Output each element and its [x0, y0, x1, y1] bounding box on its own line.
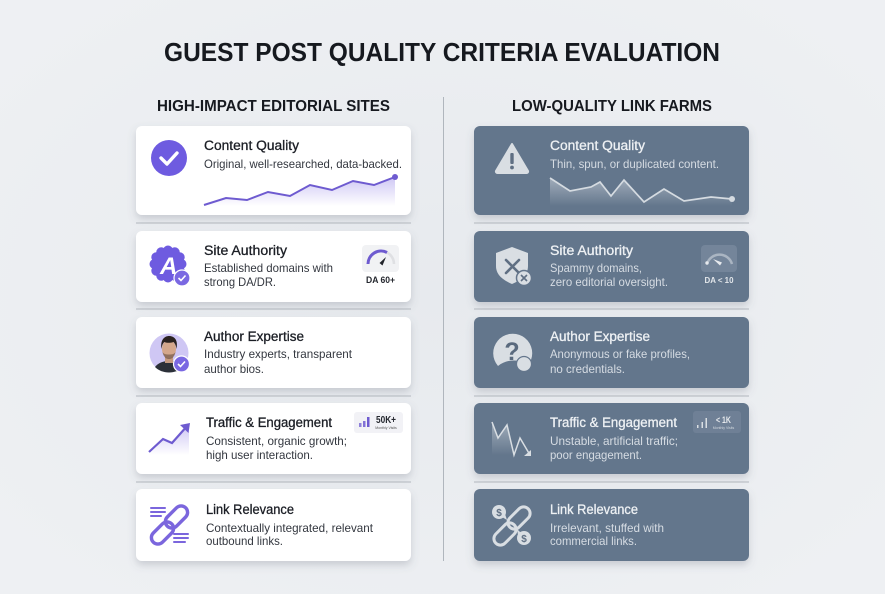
panel: low-quality content quality [474, 126, 749, 215]
card description: Consistent, organic growth; [206, 434, 347, 448]
card description: zero editorial oversight. [550, 275, 668, 289]
card description: strong DA/DR. [204, 275, 276, 289]
card description: Industry experts, transparent [204, 347, 353, 361]
title: GUEST POST QUALITY CRITERIA EVALUATION [164, 37, 720, 67]
icon: chain with dollar coins: $ [496, 508, 502, 519]
line chart: erratic [550, 178, 735, 206]
icon: rising arrow [149, 423, 190, 455]
icon: shield with x [496, 247, 532, 286]
panel: low-quality author expertise [474, 317, 749, 388]
panel: low-quality link relevance [474, 489, 749, 561]
icon: chain with dollar coins [491, 504, 533, 548]
panel: low-quality site authority [474, 231, 749, 302]
card title: Traffic & Engagement [550, 415, 677, 430]
card title: Traffic & Engagement [206, 415, 332, 430]
card title: Author Expertise [550, 329, 650, 344]
card description: no credentials. [550, 362, 625, 376]
stat badge: under 1K monthly visits: Monthly Visits [713, 426, 735, 430]
card description: Established domains with [204, 261, 333, 275]
gauge: DA below 10: DA < 10 [704, 275, 734, 285]
card description [550, 261, 668, 289]
card title: Content Quality [204, 138, 299, 153]
stat badge: under 1K monthly visits: < 1K [716, 415, 731, 426]
icon: authority badge: A [159, 253, 177, 280]
card description: Contextually integrated, relevant [206, 521, 374, 535]
stat badge: under 1K monthly visits [693, 411, 741, 433]
card description [550, 347, 690, 376]
icon: anonymous question profile: ? [504, 338, 520, 366]
icon: author avatar with badge [150, 334, 190, 372]
card description: Irrelevant, stuffed with [550, 521, 664, 535]
gauge: DA 60+: DA 60+ [366, 275, 395, 285]
icon: purple check circle [151, 140, 187, 176]
card description: commercial links. [550, 534, 637, 548]
stat badge: 50K+ monthly visits [354, 412, 403, 433]
icon: anonymous question profile [493, 334, 532, 372]
panel: high-impact author expertise [136, 317, 411, 388]
card description: poor engagement. [550, 448, 642, 462]
card description [550, 521, 664, 548]
card description: high user interaction. [206, 448, 313, 462]
card title: Content Quality [550, 138, 645, 153]
card description: Spammy domains, [550, 261, 642, 275]
card title: Link Relevance [206, 502, 294, 517]
card title: Author Expertise [204, 329, 304, 344]
heading: low-quality column: LOW-QUALITY LINK FARMS [512, 98, 712, 115]
card title: Site Authority [204, 243, 287, 258]
panel: high-impact link relevance [136, 489, 411, 561]
card description [206, 434, 347, 462]
heading: high-impact column: HIGH-IMPACT EDITORIAL SITES [157, 98, 390, 115]
card description: Thin, spun, or duplicated content. [550, 157, 719, 171]
card description: author bios. [204, 362, 264, 376]
card description [550, 434, 678, 462]
card description [206, 521, 374, 548]
panel: high-impact content quality [136, 126, 411, 215]
icon: chain with dollar coins: $ [521, 534, 527, 545]
panel: high-impact traffic and engagement [136, 403, 411, 474]
card description: Anonymous or fake profiles, [550, 347, 690, 361]
icon: authority badge [150, 246, 190, 286]
card description: Unstable, artificial traffic; [550, 434, 678, 448]
line chart: rising [204, 174, 398, 206]
card description [204, 261, 333, 289]
icon: falling arrow [492, 422, 531, 456]
icon: chain link with text lines [149, 503, 190, 547]
stat badge: 50K+ monthly visits: Monthly Visits [375, 426, 397, 430]
card title: Site Authority [550, 243, 633, 258]
icon: warning triangle [496, 144, 528, 173]
card description: outbound links. [206, 534, 283, 548]
panel: low-quality traffic and engagement [474, 403, 749, 474]
card description: Original, well-researched, data-backed. [204, 157, 402, 171]
stat badge: 50K+ monthly visits: 50K+ [376, 415, 396, 426]
gauge: DA below 10 [701, 245, 737, 285]
card description [204, 347, 353, 376]
card title: Link Relevance [550, 502, 638, 517]
panel: high-impact site authority [136, 231, 411, 302]
gauge: DA 60+ [362, 245, 399, 285]
